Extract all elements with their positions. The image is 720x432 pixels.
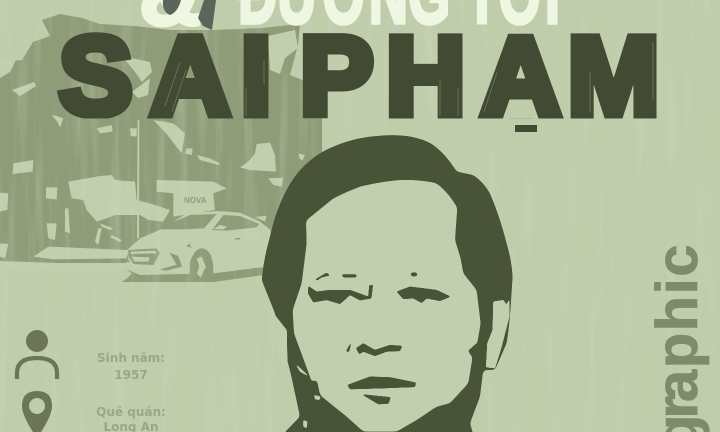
facial features xyxy=(308,272,489,404)
nose xyxy=(346,341,402,356)
face xyxy=(293,180,481,432)
light patches in scene, mapped from a 3x sketch xyxy=(0,115,305,270)
car xyxy=(122,211,273,282)
light patches in tree canopy xyxy=(0,30,305,270)
hair and neck xyxy=(262,135,513,432)
hometown text: Quê quán: xyxy=(96,405,166,419)
main title: SAI PHẠM: SAI PHẠM xyxy=(59,15,659,138)
headlight xyxy=(160,253,182,271)
grille xyxy=(128,248,160,265)
mouth xyxy=(347,377,416,404)
birth year text: Sinh năm: xyxy=(97,351,165,365)
hometown text xyxy=(96,405,166,432)
sign text on building: NOVA xyxy=(184,196,207,205)
brows and eyes xyxy=(308,285,373,304)
icon: location pin xyxy=(22,391,52,432)
background car xyxy=(254,214,273,227)
car shadow xyxy=(122,266,272,282)
birth year text xyxy=(97,351,165,382)
portrait illustration xyxy=(262,135,513,432)
street scene silhouette xyxy=(0,14,322,282)
grunge ink around ampersand xyxy=(163,0,216,30)
windshield xyxy=(160,214,217,229)
side window xyxy=(212,215,259,231)
front wheel xyxy=(189,248,213,280)
birth year text: 1957 xyxy=(114,368,148,382)
ears xyxy=(274,298,509,428)
car body xyxy=(127,211,271,273)
icon: person xyxy=(17,330,57,379)
dot of the Ạ xyxy=(515,125,537,132)
upper title: & ĐƯỜNG TỚI xyxy=(140,0,560,42)
tree canopy and buildings xyxy=(0,14,322,282)
